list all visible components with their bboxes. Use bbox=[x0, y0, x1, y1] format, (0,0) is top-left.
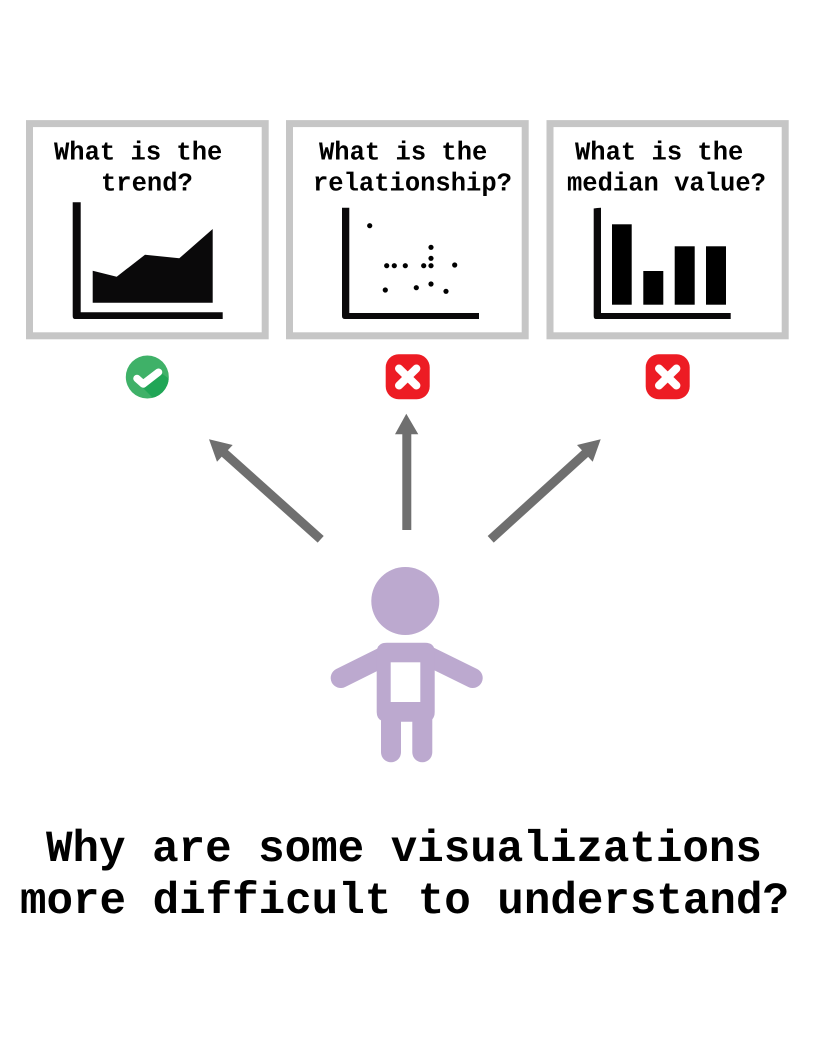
panel frame bbox=[30, 124, 265, 336]
area chart bbox=[73, 202, 223, 319]
panel question text: What is the bbox=[319, 138, 487, 168]
arrow: to relationship panel bbox=[395, 414, 418, 530]
title: more difficult to understand? bbox=[20, 877, 789, 927]
title bbox=[20, 825, 789, 927]
panel: relationship question bbox=[290, 124, 525, 336]
panel: median question bbox=[550, 124, 785, 336]
panel question text: median value? bbox=[567, 170, 766, 198]
panel question text bbox=[54, 138, 222, 198]
panel question text: What is the bbox=[575, 138, 743, 168]
panel question text: trend? bbox=[101, 170, 193, 198]
arrow: to trend panel bbox=[209, 439, 321, 539]
icon: red cross (median) bbox=[646, 354, 690, 399]
panel frame bbox=[550, 124, 785, 336]
panel frame bbox=[290, 124, 525, 336]
icon: green check bbox=[126, 356, 169, 398]
panel question text bbox=[567, 138, 766, 198]
icon: person bbox=[341, 567, 473, 762]
title: Why are some visualizations bbox=[46, 825, 762, 875]
panel: trend question bbox=[30, 124, 265, 336]
icon: red cross (relationship) bbox=[386, 354, 430, 399]
arrow: to median panel bbox=[491, 439, 601, 539]
panel question text: What is the bbox=[54, 138, 222, 168]
scatter plot bbox=[342, 208, 479, 319]
panel question text: relationship? bbox=[313, 170, 512, 198]
bar chart bbox=[594, 208, 731, 319]
panel question text bbox=[313, 138, 512, 198]
